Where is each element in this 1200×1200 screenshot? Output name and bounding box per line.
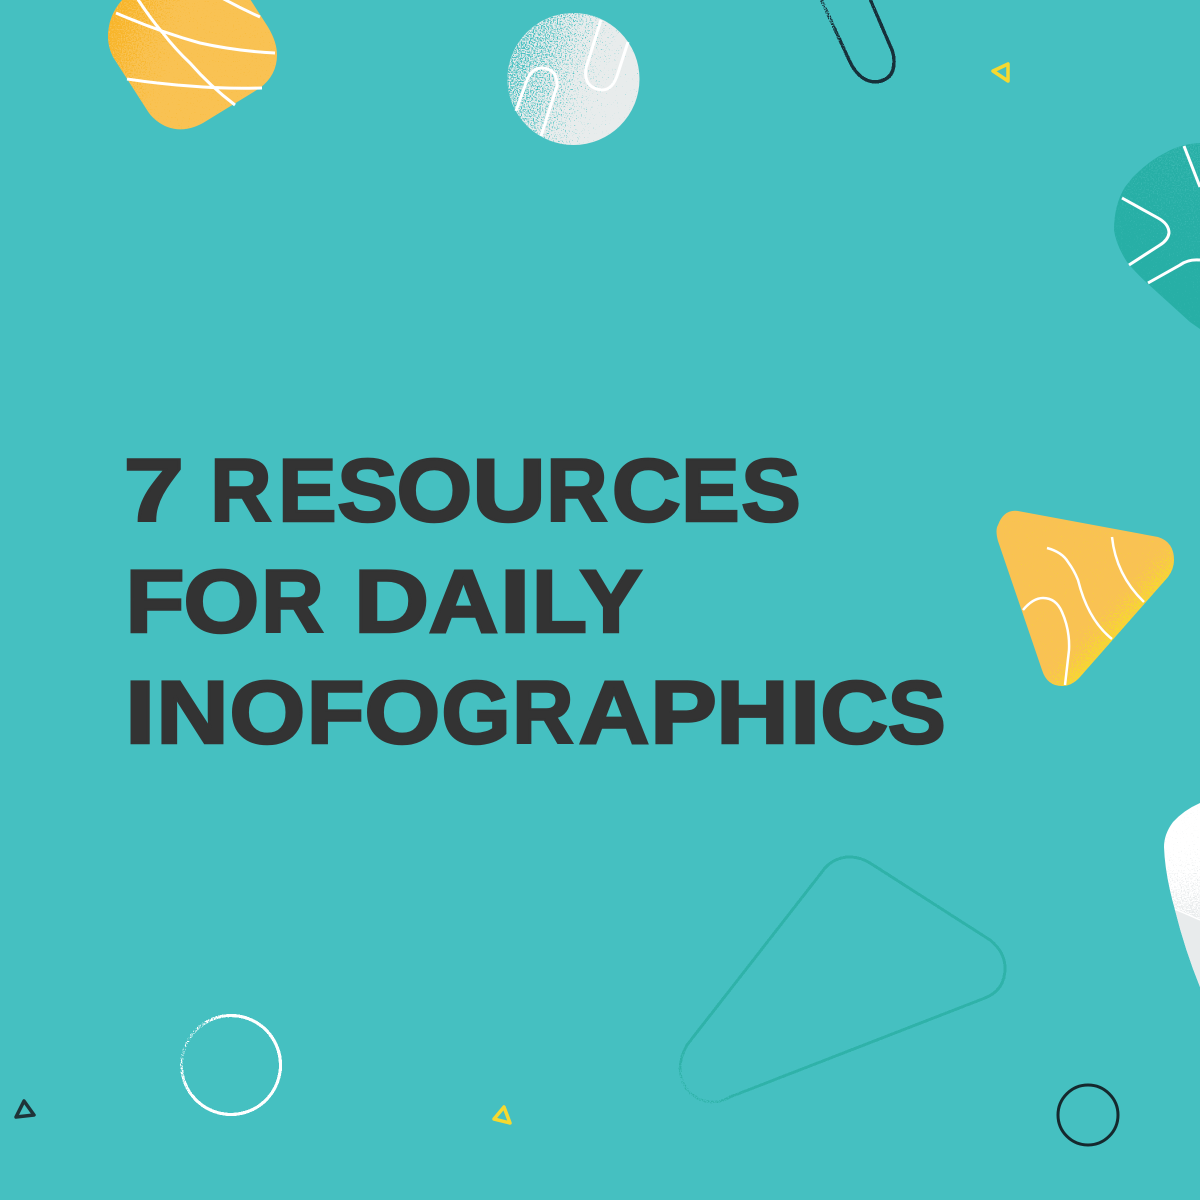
title: F [307,662,364,762]
icon: white circle outline bottom left [182,1016,280,1114]
title: H [716,662,789,762]
title: S [337,440,398,540]
title: S [888,662,946,762]
icon: teal rounded shape right [1114,143,1200,329]
title: G [441,662,511,762]
title: N [156,662,229,762]
title: O [183,551,259,651]
title: R [261,551,324,651]
title: C [820,662,888,762]
icon: dark circle outline bottom right [1058,1085,1118,1145]
title: O [396,440,472,540]
icon: dark paperclip outline top [821,0,894,82]
title: E [681,440,740,540]
title [124,440,946,762]
title: A [578,662,650,762]
title: I [500,551,531,651]
title: P [650,662,717,762]
title: R [210,440,272,540]
icon: white rounded shape lower right [1164,803,1200,987]
icon: small yellow triangle bottom centre [494,1107,510,1123]
title: E [278,440,337,540]
title: I [125,662,156,762]
title: O [364,662,440,762]
icon: white textured circle top centre [508,13,640,145]
icon: yellow rounded triangle right [996,511,1174,686]
title: F [125,551,185,651]
icon: yellow rounded blob top left [108,0,277,129]
title: A [428,551,498,651]
title: 7 [124,440,184,540]
title: I [790,662,821,762]
icon: small yellow triangle top right [993,64,1008,81]
title: D [354,551,429,651]
title: R [546,440,608,540]
title: O [229,662,305,762]
icon: small dark triangle bottom left [16,1101,34,1117]
title: U [472,440,546,540]
title: R [512,662,574,762]
title: L [532,551,587,651]
title: C [612,440,681,540]
title: Y [580,551,642,651]
title: S [741,440,801,540]
icon: teal outline triangle bottom [680,857,1005,1102]
